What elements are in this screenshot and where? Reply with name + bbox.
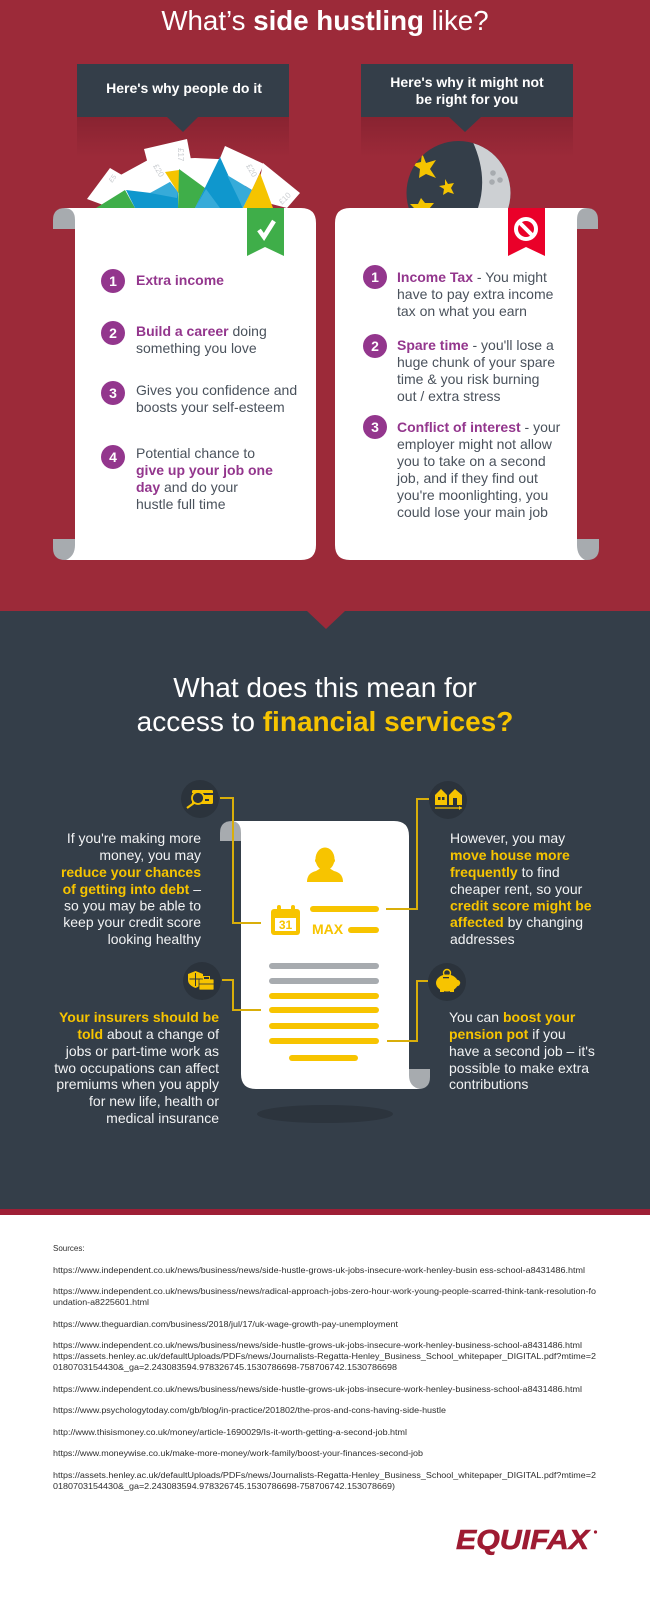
heading: financial services — [137, 672, 513, 737]
text block: moving house: addresses — [450, 931, 515, 947]
list item 3: conflict of interest: 3 — [371, 419, 379, 435]
list item 2: build a career: something you love — [136, 340, 257, 356]
callout: why it might not be right — [361, 64, 573, 157]
icon: red no-entry ribbon — [508, 208, 545, 256]
text block: pension: have a second job – it's — [449, 1043, 595, 1059]
list item 3: conflict of interest: job, and if they find out — [396, 470, 538, 486]
icon: green check ribbon — [247, 208, 284, 256]
list item 1: income tax: 1 — [371, 269, 379, 285]
text block: insurers: for new life, health or — [89, 1093, 219, 1109]
list item 3: conflict of interest: you to take on a second — [397, 453, 546, 469]
text block: insurers: jobs or part-time work as — [65, 1043, 219, 1059]
text block: insurers: told about a change of — [77, 1026, 219, 1042]
text block: moving house: affected by changing — [450, 914, 583, 930]
icon: calendar 31: 31 — [279, 918, 292, 932]
list item 1: extra income: Extra income — [136, 272, 224, 288]
text block: sources: https://www.independent.co.uk/news/business/news/side-hustle-grows-uk-jobs-insecure-work-henley-business-school-a8431486.html — [53, 1385, 582, 1394]
text block: moving house: credit score might be — [450, 898, 592, 914]
list item 1: extra income: 1 — [109, 273, 117, 289]
name and date lines: MAX — [312, 921, 344, 937]
heading: financial services: access to financial services? — [137, 706, 513, 737]
text block: insurers: two occupations can affect — [54, 1060, 219, 1076]
text block: moving house: move house more — [450, 847, 570, 863]
icon: banknotes: £17 — [176, 148, 185, 162]
callout: why it might not be right: be right for you — [416, 91, 518, 107]
icon: banknotes — [87, 139, 300, 209]
panel: left scroll card — [53, 208, 316, 560]
shadow under credit report — [257, 1105, 393, 1123]
text block: pension: contributions — [449, 1076, 528, 1092]
name and date lines — [310, 906, 379, 937]
text block: moving house: cheaper rent, so your — [450, 881, 583, 897]
text block: reduce debt: reduce your chances — [61, 864, 201, 880]
text block: sources: https://assets.henley.ac.uk/defaultUploads/PDFs/news/Journalists-Regatta-Henley_Business_School_whitepaper_DIGITAL.pdf?mtime=2 — [53, 1352, 597, 1361]
list item 3: confidence: 3 — [109, 385, 117, 401]
report text lines — [269, 963, 379, 1061]
icon: magnifier over credit card — [181, 780, 219, 818]
text block: insurers: premiums when you apply — [56, 1076, 219, 1092]
callout: why people do it — [77, 64, 289, 157]
list item 2: build a career — [101, 321, 267, 356]
text block: reduce debt: money, you may — [99, 847, 201, 863]
text block: sources: http://www.thisismoney.co.uk/money/article-1690029/Is-it-worth-getting-a-second-job.html — [53, 1428, 407, 1437]
text block: reduce debt: looking healthy — [108, 931, 201, 947]
list item 1: income tax — [363, 265, 554, 319]
list item 3: conflict of interest — [363, 415, 561, 520]
text block: sources: https://www.independent.co.uk/news/business/news/side-hustle-grows-uk-jobs-insecure-work-henley-busin ess-school-a8431486.html — [53, 1266, 585, 1275]
text block: reduce debt: so you may be able to — [64, 898, 201, 914]
panel: reasons people side hustle — [53, 64, 316, 560]
list item 2: spare time: out / extra stress — [397, 388, 500, 404]
text block: sources: undation-a8225601.html — [53, 1298, 149, 1307]
title: What’s side hustling like? — [161, 5, 489, 36]
list item 4: give up your job: Potential chance to — [136, 445, 255, 461]
list item 1: income tax: Income Tax - You might — [397, 269, 547, 285]
list item 3: conflict of interest: could lose your main job — [397, 504, 548, 520]
text block: pension: You can boost your — [449, 1009, 576, 1025]
icon: banknotes: £10 — [277, 190, 293, 206]
callout: why it might not be right: Here's why it might not — [390, 74, 544, 90]
icon: two houses with arrow — [429, 781, 467, 819]
icon: calendar 31 — [271, 905, 300, 935]
panel: right scroll card — [335, 208, 599, 560]
text block: pension — [449, 1009, 595, 1092]
list item 4: give up your job: give up your job one — [136, 462, 273, 478]
panel: reasons it might not be right — [335, 64, 599, 560]
list item 2: build a career: Build a career doing — [136, 323, 267, 339]
list item 4: give up your job: day and do your — [136, 479, 238, 495]
panel: credit report document — [220, 821, 430, 1089]
list item 1: income tax: tax on what you earn — [397, 303, 527, 319]
list item 3: conflict of interest: you're moonlighting, you — [397, 487, 548, 503]
list item 2: spare time: huge chunk of your spare — [397, 354, 555, 370]
text block: sources: Sources: — [53, 1244, 85, 1253]
text block: moving house — [450, 830, 592, 947]
list item 4: give up your job: hustle full time — [136, 496, 226, 512]
text block: sources: https://www.independent.co.uk/news/business/news/radical-approach-jobs-zero-hour-work-young-people-scarred-think-tank-resolution-fo — [53, 1287, 597, 1296]
panel: red upper section — [0, 0, 650, 611]
text block: insurers: medical insurance — [106, 1110, 219, 1126]
icon: moon and stars — [406, 141, 510, 208]
list item 1: income tax: have to pay extra income — [397, 286, 554, 302]
text block: pension: pension pot if you — [449, 1026, 566, 1042]
text block: reduce debt: of getting into debt – — [63, 881, 201, 897]
icon: person — [307, 848, 343, 882]
list item 3: confidence: Gives you confidence and — [136, 382, 297, 398]
list item 2: spare time: time & you risk burning — [397, 371, 539, 387]
icon: shield and briefcase — [183, 962, 221, 1000]
text block: pension: possible to make extra — [449, 1060, 589, 1076]
text block: sources: https://assets.henley.ac.uk/defaultUploads/PDFs/news/Journalists-Regatta-Henley_Business_School_whitepaper_DIGITAL.pdf?mtime=2 — [53, 1471, 597, 1480]
logo: Equifax: EQUIFAX — [456, 1524, 592, 1555]
list item 3: conflict of interest: employer might not allow — [397, 436, 553, 452]
text block: sources — [53, 1244, 597, 1491]
text block: reduce debt — [61, 830, 201, 947]
list item 1: extra income — [101, 269, 224, 293]
text block: insurers — [54, 1009, 219, 1126]
list item 3: confidence: boosts your self-esteem — [136, 399, 285, 415]
list item 2: spare time: Spare time - you'll lose a — [397, 337, 554, 353]
heading: financial services: What does this mean for — [173, 672, 477, 703]
text block: sources: https://www.theguardian.com/business/2018/jul/17/uk-wage-growth-pay-unemployment — [53, 1320, 399, 1329]
icon: banknotes: £20 — [244, 162, 259, 179]
icon: banknotes: £20 — [151, 162, 166, 179]
list item 2: spare time: 2 — [371, 338, 379, 354]
list item 3: conflict of interest: Conflict of interest - your — [397, 419, 561, 435]
list item 2: spare time — [363, 334, 555, 404]
list item 4: give up your job — [101, 445, 273, 512]
text block: sources: https://www.independent.co.uk/news/business/news/side-hustle-grows-uk-jobs-insecure-work-henley-business-school-a8431486.html — [53, 1341, 582, 1350]
text block: reduce debt: If you're making more — [67, 830, 201, 846]
text block: reduce debt: keep your credit score — [63, 914, 201, 930]
list item 4: give up your job: 4 — [109, 449, 117, 465]
connector lines — [220, 798, 429, 1041]
text block: insurers: Your insurers should be — [59, 1009, 219, 1025]
red footer band — [0, 1209, 650, 1215]
callout: why people do it: Here's why people do it — [106, 80, 262, 96]
text block: sources: https://www.psychologytoday.com/gb/blog/in-practice/201802/the-pros-and-cons-having-side-hustle — [53, 1406, 447, 1415]
arrow: red pointer into dark section — [307, 611, 345, 629]
list item 2: build a career: 2 — [109, 325, 117, 341]
icon: banknotes: £5 — [108, 174, 118, 184]
list item 3: confidence — [101, 381, 297, 415]
icon: piggy bank — [428, 963, 466, 1001]
panel: dark financial services section — [0, 611, 650, 1209]
text block: sources: 0180703154430&_ga=2.243083594.978326745.1530786698-758706742.1530786698 — [53, 1363, 398, 1372]
text block: sources: 0180703154430&_ga=2.243083594.978326745.1530786698-758706742.153078669) — [53, 1482, 395, 1491]
text block: moving house: frequently to find — [450, 864, 560, 880]
text block: sources: https://www.moneywise.co.uk/make-more-money/work-family/boost-your-finances-second-job — [53, 1449, 424, 1458]
text block: moving house: However, you may — [450, 830, 565, 846]
